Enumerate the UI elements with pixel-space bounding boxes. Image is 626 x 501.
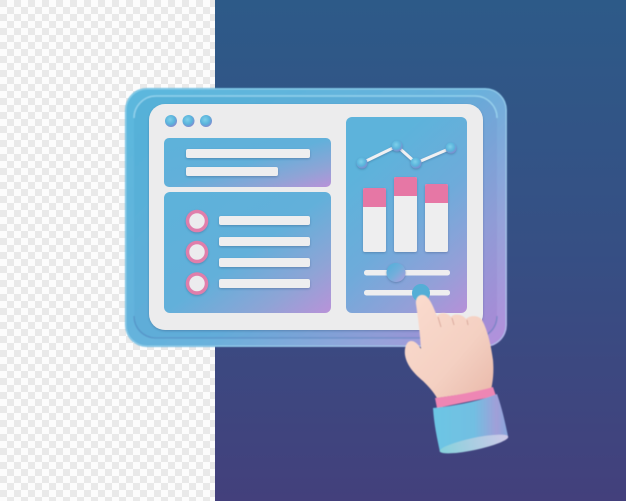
middle frame layer bbox=[134, 96, 497, 338]
white window panel bbox=[149, 104, 483, 330]
bar 3 bbox=[425, 184, 448, 252]
list line 3 bbox=[219, 258, 310, 267]
panel: header card bbox=[164, 138, 331, 187]
list line 2 bbox=[219, 237, 310, 246]
list bullet 2 bbox=[188, 242, 206, 262]
slider 2 bbox=[364, 284, 450, 302]
window control dots bbox=[165, 115, 212, 127]
header text line 1 bbox=[186, 149, 310, 158]
panel: list card bbox=[164, 192, 331, 313]
list bullet 3 bbox=[188, 274, 206, 293]
gradient background panel bbox=[215, 0, 626, 501]
bar 2 bbox=[394, 177, 417, 252]
list bullet 1 bbox=[188, 212, 206, 230]
bar 1 bbox=[363, 188, 386, 252]
knuckle creases bbox=[438, 317, 468, 327]
icon: pointing hand bbox=[405, 295, 509, 457]
hand bbox=[405, 295, 493, 398]
header text line 2 bbox=[186, 167, 278, 176]
cuff band bbox=[435, 387, 496, 408]
line chart bbox=[356, 140, 456, 168]
cuff sleeve bbox=[433, 394, 508, 452]
checkerboard background bbox=[0, 0, 215, 501]
slider 1 bbox=[364, 263, 450, 282]
panel: chart card bbox=[346, 117, 467, 313]
outer frame layer bbox=[125, 88, 507, 347]
list line 4 bbox=[219, 279, 310, 288]
list line 1 bbox=[219, 216, 310, 225]
cuff opening bbox=[439, 431, 509, 457]
window frame bbox=[125, 88, 507, 347]
